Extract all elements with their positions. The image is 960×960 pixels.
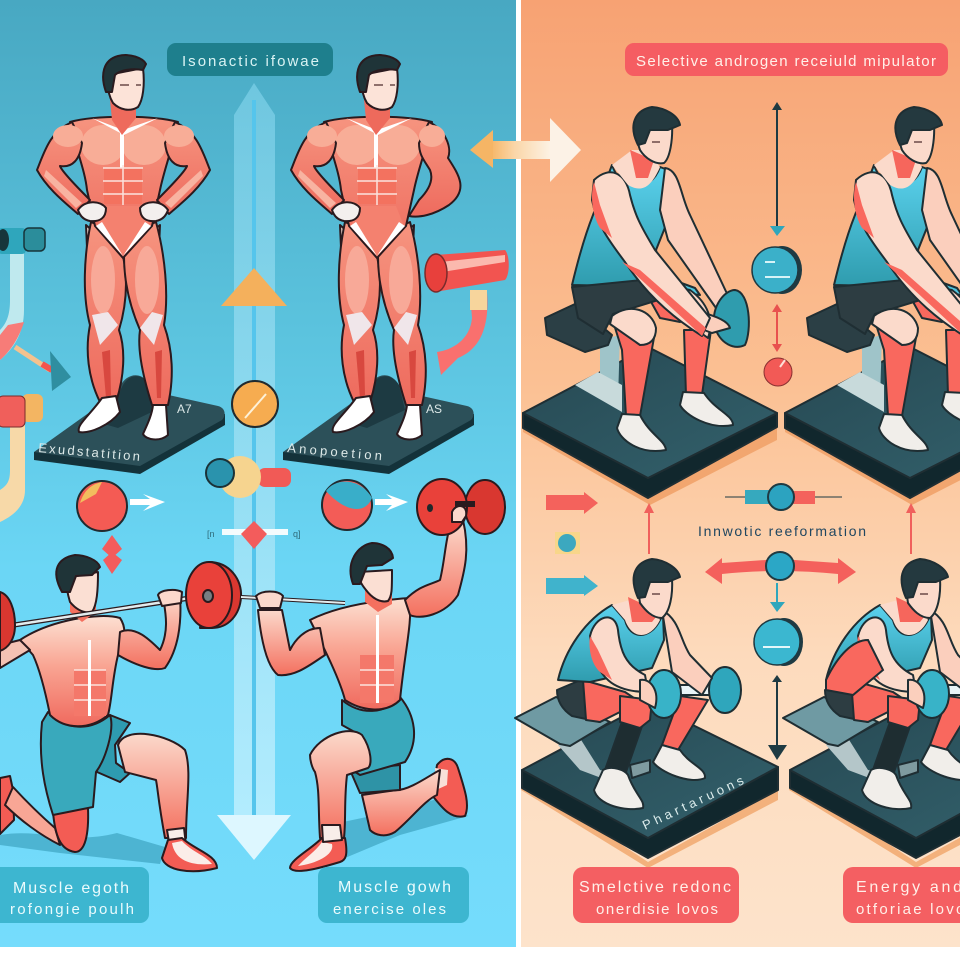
small red double arrow [772,304,782,352]
right heading pill [625,43,948,76]
teal arrow legend [546,575,598,596]
red up arrow left [644,503,654,554]
label: right panel bottom left: Smelctive redonc [579,879,731,896]
figure: standing muscle man, right [291,55,460,439]
icon: red hammer with cream strip, left edge [0,394,43,522]
yellow and blue icon [555,532,580,554]
panel: left blue background [0,0,516,947]
center caption: Innwotic reeformation [698,523,866,539]
blue and red ball with arrow [322,480,408,530]
figure: seated dumbbell man, bottom right [783,559,960,868]
orange ball [232,381,278,427]
top center connector [725,484,842,510]
right bottom label: Muscle gowh [338,879,451,896]
center diamond connector: [n [207,529,215,539]
red up arrow right [906,503,916,554]
right bottom label: enercise oles [333,901,446,918]
orange triangle [221,268,287,306]
label: right panel bottom right: Energy and [856,879,960,896]
figure: seated dumbbell man, bottom left [515,559,778,868]
icon: small arrow with teal head [15,347,71,391]
platform: right standing figure: Anopoetion [287,440,383,463]
label: right panel bottom left [573,867,739,923]
center diamond connector [207,521,301,549]
platform: left standing figure: A7 [177,402,192,416]
red diamonds [102,535,122,574]
panel: right orange background [521,0,960,947]
teal disc top [752,246,802,294]
dark vertical double arrow [768,675,787,760]
figure: seated man, top right [785,107,960,505]
red ball with arrow [77,481,165,531]
vertical arrow top [770,102,785,236]
platform: left standing figure: Exudstatition [38,440,141,464]
red arrow legend [546,492,598,514]
left bottom label [0,867,149,923]
platform: right standing figure: AS [426,402,442,416]
blue ball [766,552,794,580]
capsule connector [206,456,291,498]
teal disc bottom [754,618,803,666]
left bottom label: rofongie poulh [10,901,134,918]
shadows below kneeling figures [0,798,468,864]
red curved double arrow [705,558,856,584]
figure: kneeling barbell man, left [0,555,241,871]
left heading pill: Isonactic ifowae [182,53,319,70]
center diamond connector: q] [293,529,301,539]
label: right panel bottom left: onerdisie lovos [596,901,718,918]
right bottom label [318,867,469,923]
platform label: Phartaruons [640,772,746,833]
central vertical arrow [217,83,291,860]
teal down arrow [770,583,785,612]
double arrow between panels [470,118,581,182]
icon: teal dumbbell with curved strip, left edge [0,228,45,360]
label: right panel bottom right [843,867,960,923]
platform: right standing figure [283,375,474,474]
figure: seated man, top left [523,107,777,505]
icon: red cylinder with pink curved arrow [425,250,509,375]
red ball [764,358,792,386]
left heading pill [167,43,333,76]
right heading pill: Selective androgen receiuld mipulator [636,53,936,70]
figure: standing muscle man, left [37,55,210,439]
figure: kneeling barbell man, right [241,479,505,871]
left bottom label: Muscle egoth [13,880,129,897]
platform: left standing figure [34,375,225,474]
